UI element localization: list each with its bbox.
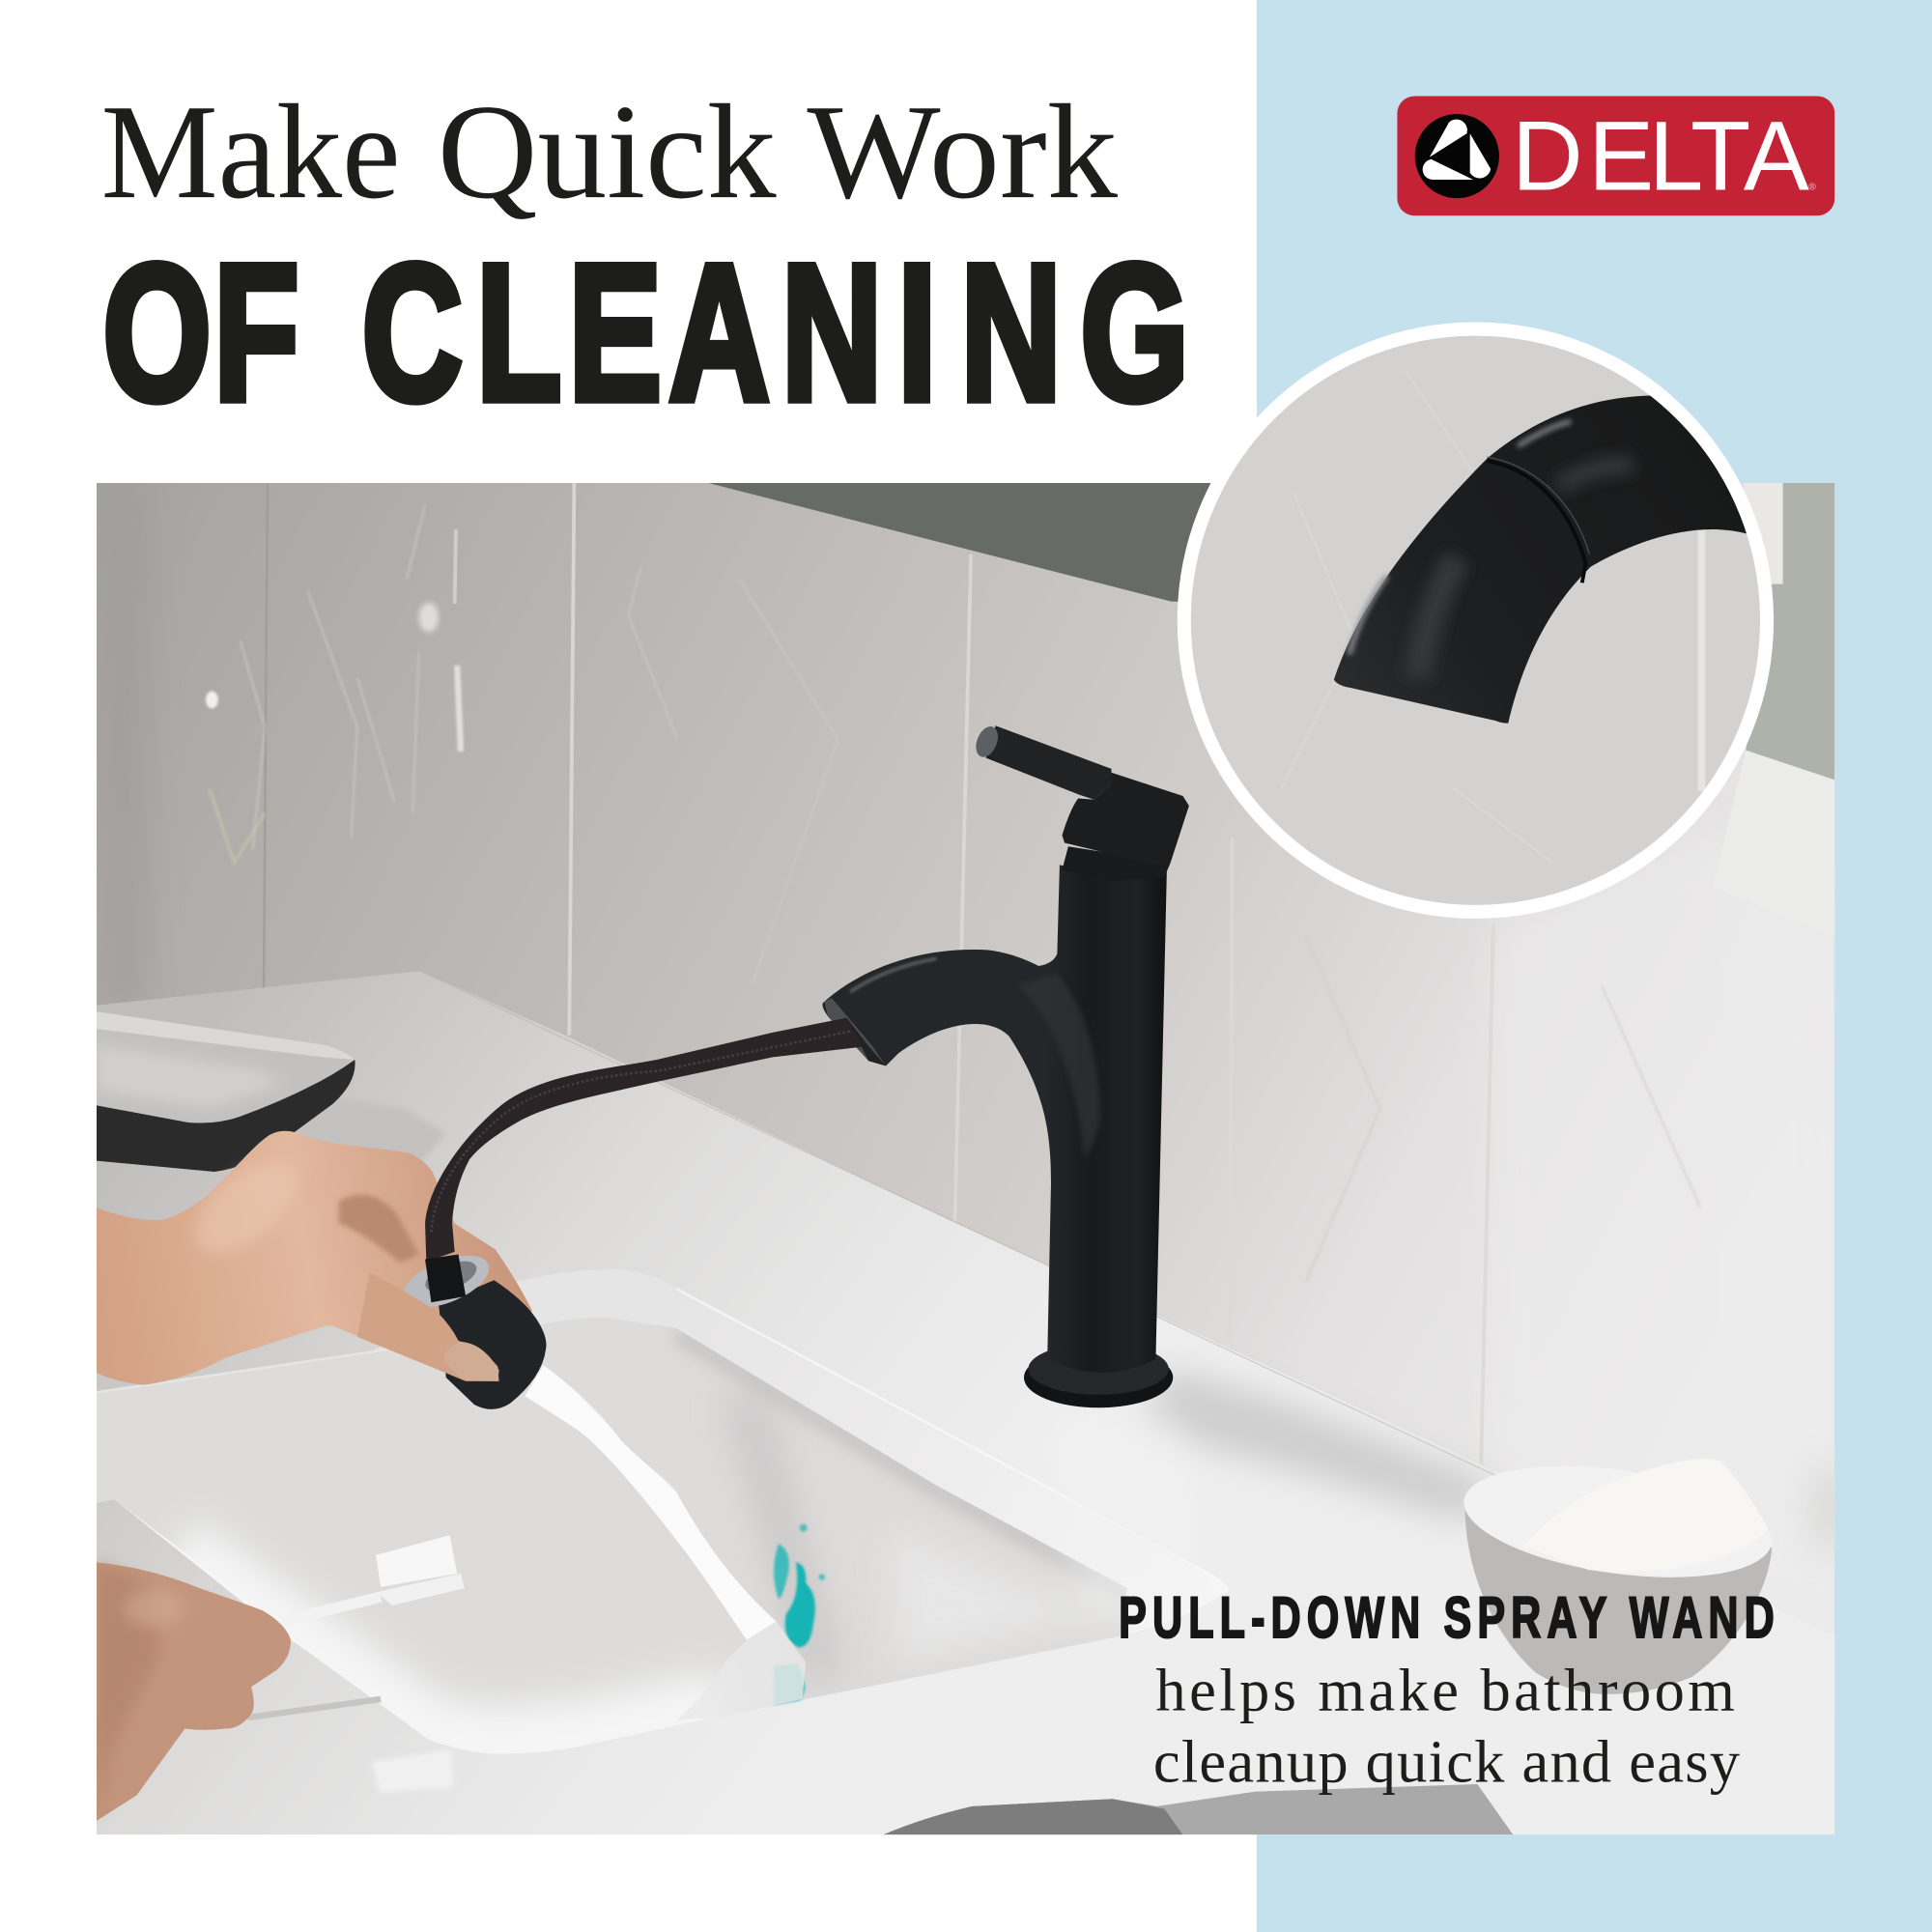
logo: Delta badge — [1397, 96, 1834, 215]
mirror edge, dark green — [708, 483, 1220, 604]
spout opening — [824, 998, 886, 1065]
towel — [884, 1784, 1513, 1834]
handle lever — [985, 725, 1112, 800]
soap bowl — [1457, 1449, 1778, 1694]
water stream — [525, 1365, 777, 1640]
right wall edge with frame — [1730, 483, 1835, 819]
title line: Make Quick Work: Make — [101, 77, 401, 227]
body fold highlight — [1018, 974, 1100, 1158]
caption heading: PULL-DOWN SPRAY WAND — [1119, 1586, 1775, 1651]
logo wordmark: DELTA — [1512, 100, 1809, 211]
water splash — [676, 1622, 806, 1720]
registered mark: ® — [1808, 182, 1816, 192]
wall tiles — [96, 483, 1834, 1716]
shadow under the rim — [676, 1333, 1127, 1592]
faucet — [822, 724, 1189, 1407]
inset background — [1182, 327, 1769, 914]
thumbnail — [443, 1342, 499, 1381]
inset seam ridge — [1488, 457, 1589, 582]
countertop — [96, 971, 1834, 1834]
spout highlight — [850, 958, 936, 992]
tray shadow on counter — [338, 1105, 443, 1160]
inset tile seam — [1698, 527, 1704, 791]
faucet base ring — [1024, 1343, 1173, 1407]
icon: Delta tri-drop mark — [1415, 114, 1499, 198]
inset body sheen — [1417, 558, 1458, 678]
inset white ring — [1184, 329, 1767, 912]
inset wall pattern — [1282, 370, 1552, 863]
hand — [96, 1131, 532, 1385]
inset left highlight — [1350, 576, 1387, 654]
teal stain in basin — [774, 1524, 825, 1705]
thumb — [357, 1273, 499, 1381]
hand holding spray wand — [96, 1018, 886, 1409]
inset spout — [1334, 394, 1780, 724]
basin interior — [96, 1306, 1155, 1762]
handle neck — [1062, 846, 1171, 881]
finger crease shadow — [339, 1194, 419, 1263]
title line: Make Quick Work: Quick — [438, 77, 777, 227]
knuckle highlight — [179, 1144, 314, 1271]
title line: Make Quick Work — [101, 77, 1119, 227]
inset circle: spout close-up — [1182, 327, 1780, 914]
handle cap — [1062, 773, 1189, 867]
rim highlight — [676, 1289, 1228, 1592]
title line: Make Quick Work: Work — [807, 77, 1119, 227]
chrome connector — [396, 1245, 497, 1318]
braided hose — [425, 1018, 868, 1302]
dark soap tray — [96, 1011, 355, 1172]
far basin wall highlight — [900, 1551, 1041, 1646]
faucet body and spout — [822, 865, 1167, 1373]
inset upper sheen — [1559, 466, 1633, 487]
spray wand head — [439, 1280, 546, 1409]
caption line 1: helps make bathroom — [1155, 1656, 1735, 1723]
sink rim — [97, 1269, 620, 1393]
lever end cap — [972, 724, 1002, 760]
soft white front lip of the basin — [173, 1555, 727, 1749]
white left lip — [117, 1501, 185, 1556]
soap bar — [1524, 1459, 1768, 1573]
spout hose exit — [846, 1018, 886, 1065]
counter back-edge line — [420, 971, 1499, 1477]
toothbrush — [316, 1535, 465, 1615]
photo: faucet in use over a bathroom sink — [96, 483, 1850, 1834]
inset top sheen — [1518, 421, 1571, 446]
faucet shadow on counter — [1146, 1368, 1497, 1521]
second hand with toothbrush — [96, 1562, 291, 1821]
counter reflections — [247, 1417, 1195, 1793]
caption line 2: cleanup quick and easy — [1153, 1727, 1740, 1795]
basin back-wall corner shadow — [743, 1392, 824, 1681]
hose collar — [425, 1254, 466, 1302]
blue background panel — [1257, 0, 1932, 1932]
title line: OF CLEANING: OF CLEANING — [103, 224, 1189, 440]
bowl shadow on wall — [1806, 1474, 1834, 1546]
